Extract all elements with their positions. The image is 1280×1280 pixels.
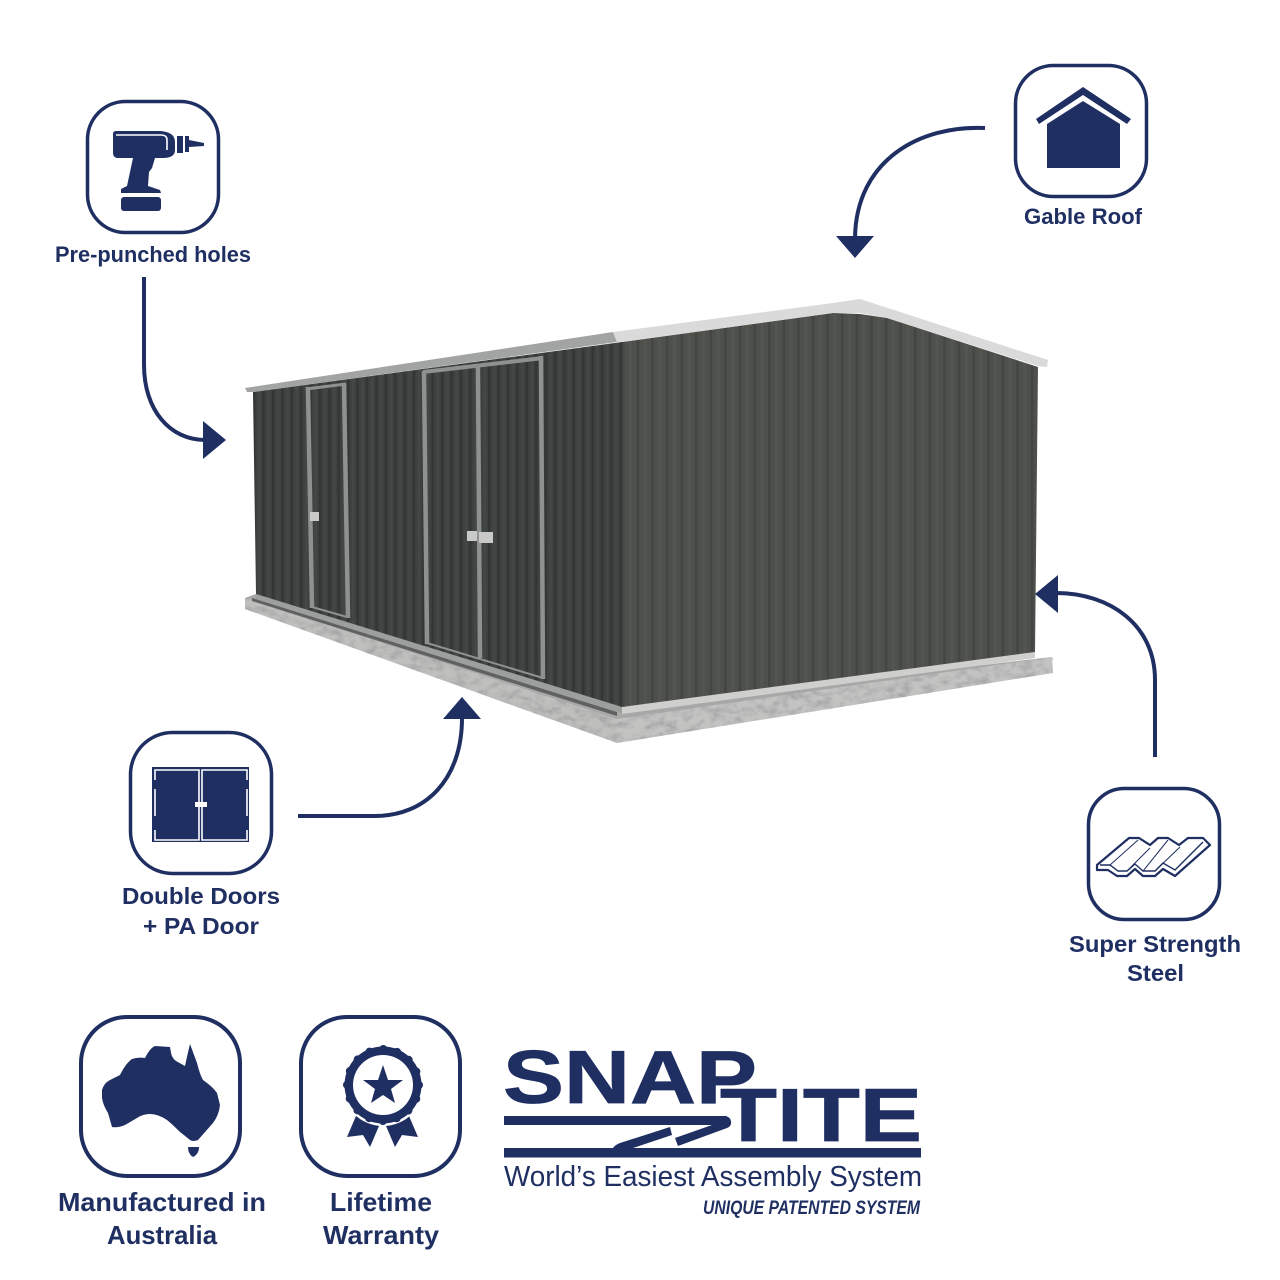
icon card: gable roof <box>1016 66 1146 196</box>
icon card: double doors <box>130 732 272 874</box>
label: double doors + PA door: + PA Door <box>143 913 259 939</box>
shed illustration <box>245 299 1053 743</box>
gable end wall <box>622 313 1038 707</box>
icon card: drill <box>88 102 218 232</box>
label: lifetime warranty: Lifetime <box>330 1187 432 1217</box>
Snap-Tite logo: World’s Easiest Assembly System <box>504 1161 922 1193</box>
label: double doors + PA door: Double Doors <box>122 883 280 909</box>
arrow: to side wall <box>144 277 226 459</box>
label: manufactured in Australia: Manufactured in <box>58 1187 266 1217</box>
Snap-Tite logo: UNIQUE PATENTED SYSTEM <box>703 1198 921 1219</box>
arrow: to doors <box>298 697 481 816</box>
icon card: corrugated steel <box>1088 788 1220 920</box>
concrete slab <box>245 594 1053 743</box>
label: gable roof: Gable Roof <box>1024 204 1143 229</box>
Snap-Tite logo <box>503 1035 922 1219</box>
arrow: to steel wall <box>1035 575 1155 757</box>
label: lifetime warranty <box>323 1187 440 1250</box>
label: pre-punched holes: Pre-punched holes <box>55 242 251 267</box>
label: lifetime warranty: Warranty <box>323 1220 440 1250</box>
arrow: to roof <box>836 128 985 258</box>
Snap-Tite logo: SNAP <box>503 1035 757 1119</box>
label: double doors + PA door <box>122 883 280 939</box>
base flashing <box>252 594 1035 716</box>
door latches <box>310 512 493 543</box>
double door frame <box>423 356 543 679</box>
long side wall <box>253 342 622 707</box>
label: super strength steel <box>1069 931 1241 986</box>
gable roof capping <box>613 299 1048 367</box>
Snap-Tite logo: TITE <box>720 1073 922 1157</box>
icon card: Australia <box>81 1017 240 1176</box>
icon card: lifetime warranty rosette <box>301 1017 460 1176</box>
label: super strength steel: Super Strength <box>1069 931 1241 957</box>
label: manufactured in Australia <box>58 1187 266 1250</box>
label: super strength steel: Steel <box>1127 960 1184 986</box>
PA door frame <box>306 383 348 618</box>
side roof edge <box>245 332 617 392</box>
label: manufactured in Australia: Australia <box>107 1220 218 1250</box>
